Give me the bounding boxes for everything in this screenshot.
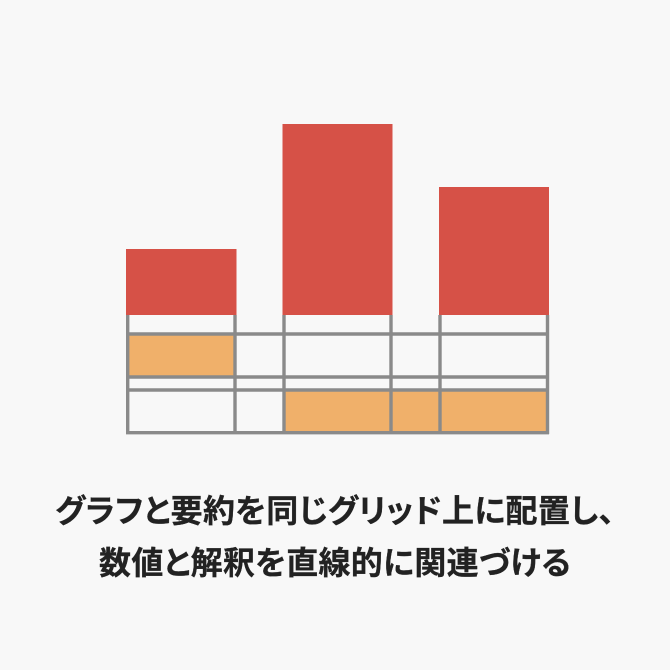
caption text [55, 493, 615, 581]
bar: left [126, 249, 236, 315]
caption text: 数値と解釈を直線的に関連づける [99, 545, 571, 581]
orange cells: bottom summary row [285, 392, 546, 432]
orange cell: left summary [129, 336, 234, 376]
bar: right [439, 187, 549, 315]
caption text: グラフと要約を同じグリッド上に配置し、 [55, 493, 615, 529]
bar: center tall [282, 124, 392, 315]
summary table grid [126, 315, 549, 434]
